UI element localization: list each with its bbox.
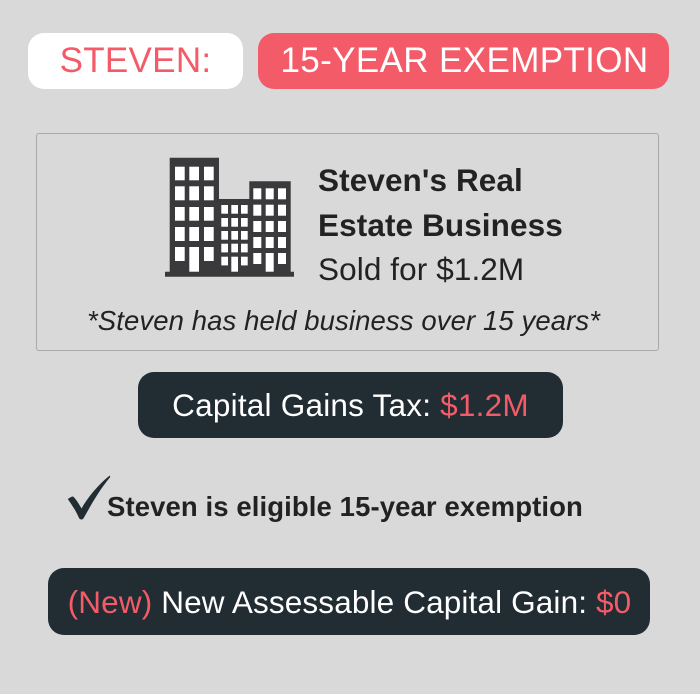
heading: Steven's Real Estate Business bbox=[318, 162, 563, 243]
text: sold price: Sold for $1.2M bbox=[318, 251, 524, 287]
panel: real estate business bbox=[36, 133, 659, 351]
callout: capital gains tax bbox=[138, 372, 563, 438]
text: eligibility statement: Steven is eligible 15-year exemption bbox=[107, 491, 583, 522]
heading: Steven's Real Estate Business: Steven's Real bbox=[318, 162, 523, 198]
note: held over 15 years: *Steven has held business over 15 years* bbox=[87, 305, 600, 336]
title label: Steven: STEVEN: bbox=[60, 41, 211, 80]
heading: Steven's Real Estate Business: Estate Business bbox=[318, 207, 563, 243]
callout: new assessable capital gain bbox=[48, 568, 650, 635]
callout: capital gains tax: Capital Gains Tax: $1.2M bbox=[172, 387, 529, 423]
icon: check mark bbox=[68, 476, 110, 520]
title banner: 15-year exemption: 15-YEAR EXEMPTION bbox=[280, 41, 649, 80]
icon: office buildings bbox=[165, 158, 294, 277]
title label: Steven bbox=[28, 33, 243, 89]
title banner: 15-year exemption bbox=[258, 33, 669, 89]
callout: new assessable capital gain: (New) New Assessable Capital Gain: $0 bbox=[68, 584, 631, 620]
